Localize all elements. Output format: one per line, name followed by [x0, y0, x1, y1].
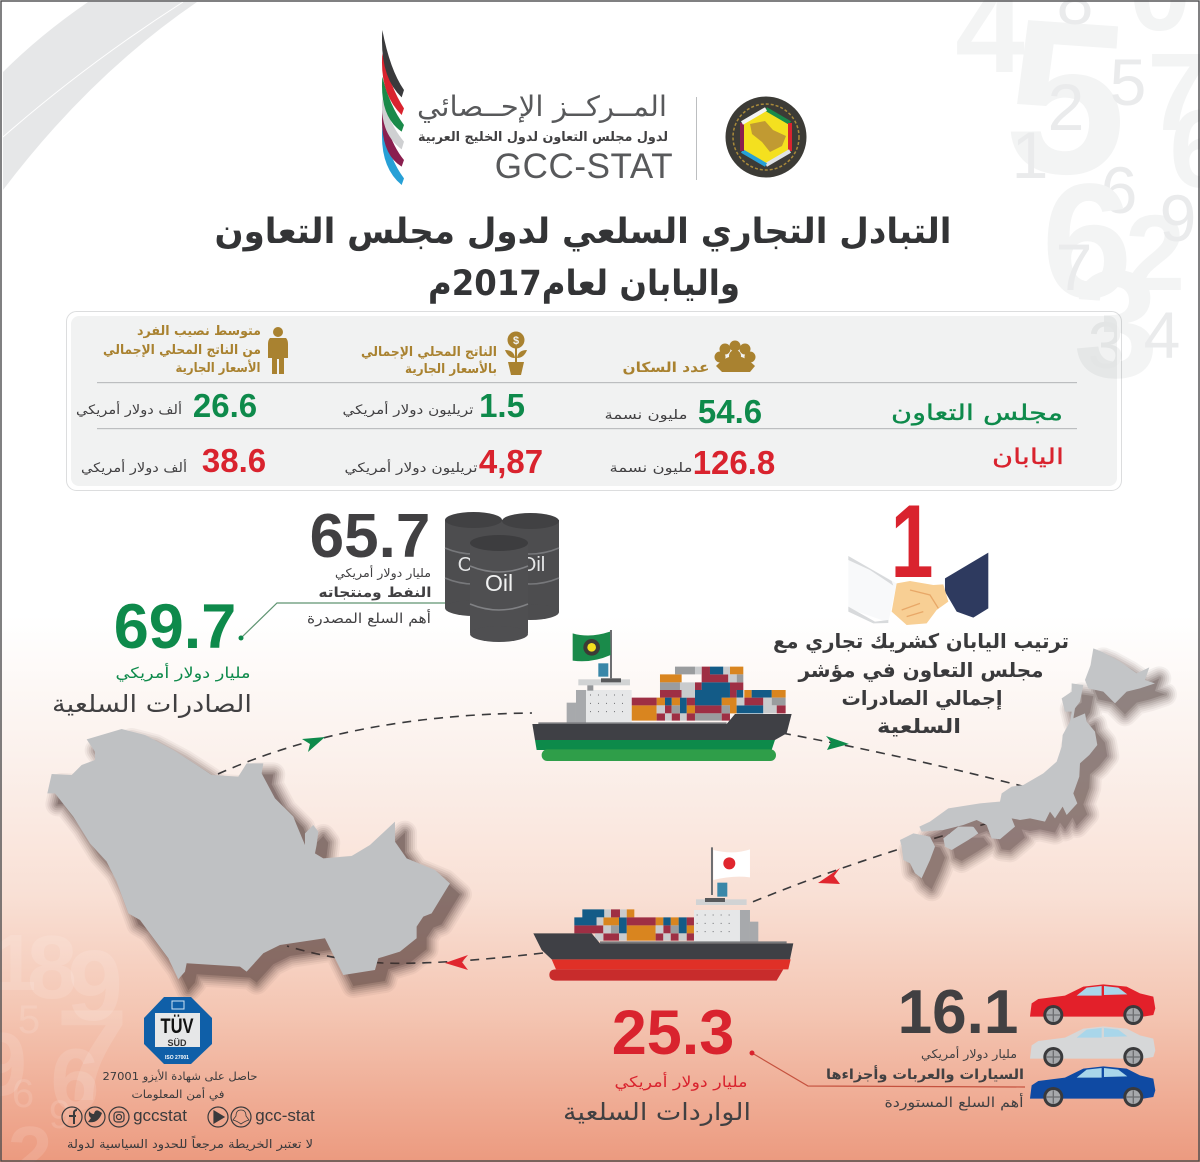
- value: Japan population: 126.8: [693, 444, 775, 481]
- funnel: [598, 663, 608, 677]
- value: GCC GDP: 1.5: [479, 387, 525, 424]
- value: GCC per capita: 26.6: [193, 387, 257, 424]
- exports total: [52, 592, 252, 718]
- badge: TUV: [144, 997, 212, 1064]
- value: GCC population: [604, 393, 762, 430]
- icon: handshake: [848, 553, 988, 625]
- value: Japan GDP: 4,87: [479, 443, 543, 480]
- logo name arabic: المــركــز الإحــصائي: [417, 90, 667, 123]
- value: Japan GDP: [344, 443, 543, 480]
- row: Japan: [81, 442, 1064, 481]
- background numbers bottom left: 9: [67, 930, 123, 1042]
- background numbers top right: 4: [1144, 298, 1180, 372]
- funnel: [717, 883, 727, 897]
- exports unit: مليار دولار أمريكي: [116, 663, 250, 683]
- background numbers top right: 3: [1073, 239, 1159, 410]
- background numbers bottom left: [0, 918, 128, 1162]
- unit: مليار دولار أمريكي: [921, 1046, 1017, 1062]
- ship: GCC exports: [532, 630, 792, 761]
- route lines: [218, 713, 1022, 963]
- value 69.7: 69.7: [114, 592, 236, 662]
- logo: GCC-STAT: [382, 30, 806, 186]
- title line 2: واليابان لعام2017م: [428, 264, 740, 304]
- label: population: عدد السكان: [622, 360, 710, 376]
- superstructure: [567, 678, 632, 723]
- containers: [574, 909, 694, 941]
- flag: GCC: [573, 632, 611, 661]
- background numbers bottom left: 8: [27, 918, 77, 1018]
- badge: TUV: TÜV: [160, 1015, 194, 1038]
- icon: grey car: [1030, 1026, 1155, 1067]
- value: Japan per capita: 38.6: [202, 442, 266, 479]
- value: Japan GDP: تريليون دولار أمريكي: [344, 459, 478, 476]
- value 65.7: 65.7: [310, 502, 430, 571]
- rank number 1: 1: [891, 484, 933, 600]
- row label Japan: اليابان: [992, 445, 1064, 470]
- background numbers bottom left: 9: [49, 1093, 71, 1137]
- background numbers top right: [955, 0, 1200, 410]
- icon: people: [714, 340, 756, 372]
- imports total: [563, 998, 751, 1126]
- rank text line 4: السلعية: [877, 714, 961, 738]
- icon: money plant: $: [513, 335, 519, 347]
- map disclaimer: لا تعتبر الخريطة مرجعاً للحدود السياسية لدولة: [67, 1135, 313, 1152]
- value: GCC per capita: [76, 387, 257, 424]
- map: Japan: [900, 648, 1165, 889]
- handle gccstat: gccstat: [133, 1106, 187, 1125]
- value: GCC GDP: [342, 387, 525, 424]
- commodity name: النفط ومنتجاته: [318, 585, 432, 601]
- hull: [533, 933, 793, 981]
- panel: comparison table: [66, 312, 1122, 490]
- value 25.3: 25.3: [612, 998, 734, 1068]
- mast: [711, 847, 713, 895]
- background numbers bottom left: 7: [56, 982, 128, 1128]
- logo latin name: GCC-STAT: [495, 147, 673, 186]
- background numbers top right: 1: [1012, 118, 1048, 192]
- value: GCC per capita: ألف دولار أمريكي: [76, 401, 182, 418]
- footer block: [62, 997, 315, 1152]
- value: Japan population: [610, 444, 775, 481]
- ISO text line 2: في أمن المعلومات: [132, 1087, 224, 1101]
- ship: Japan imports: [533, 847, 793, 981]
- background numbers top right: 3: [1088, 308, 1124, 382]
- value: Japan population: مليون نسمة: [610, 461, 692, 476]
- imports unit: مليار دولار أمريكي: [614, 1072, 748, 1092]
- label: GDP line 2: بالأسعار الجارية: [405, 360, 497, 377]
- flag: Japan: [713, 849, 750, 880]
- decorative swoosh top left: [3, 2, 197, 190]
- icon: person: [268, 327, 288, 374]
- ISO text line 1: حاصل على شهادة الأيزو 27001: [102, 1069, 258, 1083]
- unit: مليار دولار أمريكي: [335, 565, 431, 581]
- social icons right: [208, 1107, 251, 1127]
- label: per capita line 2: من الناتج المحلي الإجمالي: [103, 343, 261, 358]
- badge: TUV: ISO 27001: [165, 1055, 189, 1061]
- exports leader line: [238, 603, 445, 640]
- emblem: [726, 96, 806, 178]
- background numbers bottom left: 5: [18, 998, 40, 1042]
- icon: red car: [1030, 984, 1155, 1025]
- value: GCC population: 54.6: [698, 393, 762, 430]
- row label GCC: مجلس التعاون: [891, 401, 1063, 426]
- title: [214, 212, 952, 304]
- arrow: export green 2: [826, 736, 849, 750]
- background numbers bottom left: 6: [12, 1072, 34, 1116]
- value: Japan per capita: [81, 442, 266, 479]
- imports leader line: [750, 1050, 1025, 1087]
- partner rank: [773, 484, 1069, 738]
- barrel back left: Oil: [458, 554, 482, 576]
- background numbers top right: 2: [1048, 70, 1084, 144]
- arrow: import red 1: [818, 868, 840, 884]
- commodity name: السيارات والعربات وأجزاءها: [826, 1065, 1024, 1083]
- arrow: import red 2: [445, 955, 468, 970]
- background numbers bottom left: 6: [51, 1030, 99, 1129]
- map: GCC: [47, 729, 460, 990]
- background numbers top right: 6: [1101, 153, 1137, 227]
- top export commodity: oil: [307, 502, 432, 627]
- containers: [632, 667, 786, 721]
- rank text line 3: إجمالي الصادرات: [842, 686, 1002, 711]
- mast: [610, 630, 612, 678]
- value: GCC GDP: تريليون دولار أمريكي: [342, 401, 474, 418]
- caption: أهم السلع المستوردة: [884, 1093, 1024, 1111]
- hull: [532, 714, 792, 761]
- social icons left: [62, 1107, 129, 1127]
- caption: أهم السلع المصدرة: [307, 609, 431, 627]
- background numbers top right: 2: [1125, 192, 1185, 313]
- imports label: الواردات السلعية: [563, 1098, 751, 1126]
- logo subtitle: لدول مجلس التعاون لدول الخليج العربية: [418, 130, 668, 145]
- header: GDP: [361, 332, 527, 377]
- value 16.1: 16.1: [898, 978, 1018, 1047]
- icon: money plant: [505, 332, 527, 375]
- handle gcc-stat: gcc-stat: [255, 1106, 315, 1125]
- icon: blue car: [1030, 1066, 1155, 1107]
- header: GDP per capita: [103, 324, 288, 376]
- barrel back right: Oil: [521, 554, 545, 576]
- background numbers top right: 5: [1110, 45, 1146, 119]
- barrel front: Oil: [485, 570, 513, 596]
- label: per capita line 1: متوسط نصيب الفرد: [137, 324, 261, 339]
- label: GDP line 1: الناتج المحلي الإجمالي: [361, 345, 497, 360]
- header: population: [622, 340, 756, 376]
- logo ribbons: [382, 30, 404, 185]
- title line 1: التبادل التجاري السلعي لدول مجلس التعاون: [214, 212, 952, 252]
- background numbers top right: 7: [1056, 230, 1092, 304]
- row: GCC: [76, 387, 1063, 430]
- background numbers top right: 6: [1042, 149, 1132, 332]
- value: Japan per capita: ألف دولار أمريكي: [81, 459, 187, 476]
- superstructure: [694, 898, 758, 943]
- label: per capita line 3: الأسعار الجارية: [176, 359, 260, 376]
- badge: TUV: SÜD: [167, 1038, 187, 1048]
- exports label: الصادرات السلعية: [52, 690, 252, 718]
- arrow: export green 1: [302, 737, 325, 752]
- rank text line 1: ترتيب اليابان كشريك تجاري مع: [773, 629, 1069, 654]
- value: GCC population: مليون نسمة: [604, 408, 688, 423]
- rank text line 2: مجلس التعاون في مؤشر: [798, 658, 1044, 683]
- background numbers top right: 9: [1160, 181, 1196, 255]
- top import commodity: cars: [826, 978, 1024, 1111]
- icon: oil barrels: [445, 512, 559, 642]
